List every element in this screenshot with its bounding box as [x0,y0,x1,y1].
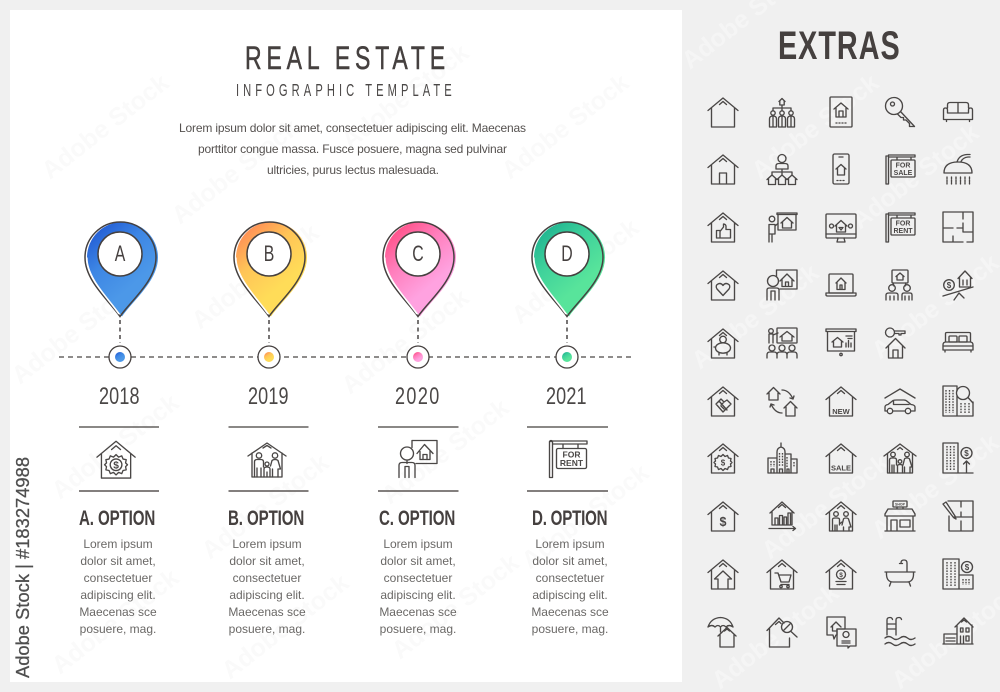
watermark pattern on extras: Adobe Stock [756,449,894,565]
icon: building value up: $ [964,449,969,458]
icon: laptop house [826,274,856,296]
icon: house dollar gear [708,444,738,473]
pin C with milestone [383,222,456,368]
pin B with milestone [234,222,307,368]
icon: car port [885,389,915,414]
icon: for sale sign [886,155,915,184]
body text: consectetuer [536,571,604,585]
option B column [228,427,308,636]
icon: for rent sign [886,213,915,242]
icon: sale house [826,444,856,473]
body text: adipiscing elit. [380,588,456,602]
watermark pattern on sheet: Adobe Stock [516,459,654,575]
icon: agent over houses [767,154,797,184]
panel: extras icon grid [708,97,973,648]
watermark pattern on sheet: Adobe Stock [36,69,174,185]
icon: presenter board [769,213,797,242]
icon: shower [944,154,972,184]
subtitle: INFOGRAPHIC TEMPLATE [236,80,452,101]
body text: Lorem ipsum [232,537,302,551]
extras heading: EXTRAS [778,23,900,68]
icon: house dollar: $ [720,515,727,529]
icon: shop [885,501,915,531]
watermark pattern on extras: Adobe Stock [686,259,824,375]
watermark pattern on extras: Adobe Stock [706,579,844,692]
icon: bathtub [885,560,915,586]
icon: shop: SHOP [895,502,906,506]
intro paragraph: porttitor congue massa. Fusce posuere, magna sed pulvinar [198,142,507,156]
pin A with milestone: A [115,243,125,267]
icon: for rent sign: RENT [893,228,913,235]
icon: couple house [826,502,856,531]
body text [228,537,306,636]
watermark pattern on sheet: Adobe Stock [336,39,474,155]
icon: couple with house [886,270,912,300]
watermark pattern on extras: Adobe Stock [866,249,1000,365]
body text: Maecenas sce [228,605,306,619]
icon: house growth chart [769,502,796,530]
body text: adipiscing elit. [80,588,156,602]
icon: house with family [248,443,286,477]
pin A with milestone [85,222,158,368]
watermark pattern on sheet: Adobe Stock [496,69,634,185]
icon: building value up [943,443,973,473]
year 2019: 2019 [248,384,288,410]
icon: city buildings [768,443,797,473]
icon: for rent sign: FOR [896,220,910,228]
icon: house with dollar gear: $ [113,461,119,472]
icon: house with garage [943,618,973,644]
year 2020: 2020 [395,384,439,410]
intro paragraph [179,121,526,177]
icon: for rent sign: RENT [560,458,584,468]
body text [79,537,157,636]
body text: Lorem ipsum [383,537,453,551]
watermark pattern on sheet: Adobe Stock [336,284,474,400]
pin D with milestone [532,222,605,368]
watermark pattern on sheet: Adobe Stock [46,389,184,505]
icon: house dollar gear: $ [721,458,726,468]
watermark pattern on extras: Adobe Stock [846,119,984,235]
stock id vertical label: Adobe Stock | #183274988 [12,457,33,678]
icon: for sale sign: SALE [894,170,913,177]
body text: Maecenas sce [379,605,457,619]
watermark pattern on extras: Adobe Stock [746,69,884,185]
icon: for rent sign: FOR [563,450,580,460]
title: REAL ESTATE [245,40,445,76]
body text [531,537,609,636]
icon: plan with pencil [943,501,973,531]
option D column [527,427,609,636]
icon: house deed: $ [839,572,843,579]
icon: new house: NEW [832,407,851,416]
watermark pattern on sheet: Adobe Stock [196,449,334,565]
heading: C. OPTION [379,505,455,530]
icon: bed [943,332,973,352]
watermark pattern on sheet: Adobe Stock [6,274,144,390]
body text: consectetuer [384,571,452,585]
icon: family house [884,444,916,473]
icon: sale house: SALE [831,464,851,472]
year 2018: 2018 [99,384,140,410]
icon: insured house umbrella [708,618,736,647]
icon: team org chart [770,98,794,127]
watermark pattern on extras: Adobe Stock [866,429,1000,545]
body text: posuere, mag. [80,622,156,636]
timeline dashed line [59,356,632,358]
pin B with milestone: B [264,243,274,267]
icon: house thumbs up [708,213,738,242]
body text: Lorem ipsum [535,537,605,551]
year 2021: 2021 [546,384,586,410]
icon: house dollar [708,502,738,531]
icon: house with door [708,155,738,184]
icon: monitor house [826,214,856,242]
watermark pattern on sheet: Adobe Stock [386,549,524,665]
icon: key above house [886,328,905,358]
body text: dolor sit amet, [229,554,305,568]
watermark pattern on sheet: Adobe Stock [506,214,644,330]
body text: adipiscing elit. [532,588,608,602]
icon: balance with dollar and house: $ [947,281,952,290]
pin D with milestone: D [561,243,573,267]
body text: Lorem ipsum [83,537,153,551]
icon: swimming pool [885,618,915,646]
icon: house piggy bank [708,329,738,358]
icon: house with dollar gear [97,441,135,478]
icon: house search [767,618,797,647]
icon: exchange houses [767,388,797,416]
panel: white infographic sheet [10,10,682,682]
icon: agent house board [767,270,797,300]
icon: new house [826,387,856,416]
icon: house heart [708,271,738,300]
icon: for rent sign [550,440,587,478]
icon: building with dollar: $ [965,563,970,572]
option A column [79,427,159,636]
icon: presentation chart [826,329,856,356]
watermark pattern on sheet: Adobe Stock [376,394,514,510]
body text: consectetuer [84,571,152,585]
icon: tablet house [830,97,852,127]
icon: chat houses [827,617,856,648]
body text: dolor sit amet, [80,554,156,568]
icon: presenter audience [767,328,797,358]
pin C with milestone: C [412,243,424,267]
body text: Maecenas sce [79,605,157,619]
watermark pattern on sheet: Adobe Stock [186,219,324,335]
body text [379,537,457,636]
icon: key [886,98,914,126]
icon: house deed [826,560,856,589]
body text: posuere, mag. [380,622,456,636]
watermark pattern on sheet: Adobe Stock [216,569,354,685]
icon: building with dollar [943,559,973,589]
icon: house [708,98,738,127]
body text: dolor sit amet, [532,554,608,568]
icon: house handshake [708,387,738,416]
icon: balance with dollar and house [943,271,973,300]
icon: for sale sign: FOR [896,162,910,170]
heading: B. OPTION [228,505,304,530]
body text: consectetuer [233,571,301,585]
watermark pattern on sheet [6,39,654,685]
icon: building search [943,386,973,416]
intro paragraph: ultricies, purus lectus malesuada. [267,163,439,177]
icon: house shopping cart [767,560,797,589]
body text: Maecenas sce [531,605,609,619]
icon: agent with house board [399,440,437,478]
body text: dolor sit amet, [380,554,456,568]
intro paragraph: Lorem ipsum dolor sit amet, consectetuer adipiscing elit. Maecenas [179,121,526,135]
watermark pattern on sheet: Adobe Stock [46,564,184,680]
body text: posuere, mag. [532,622,608,636]
heading: A. OPTION [79,505,155,530]
body text: posuere, mag. [229,622,305,636]
icon: phone house [833,154,849,184]
watermark pattern on sheet: Adobe Stock [166,114,304,230]
icon: floor plan [943,212,973,242]
icon: house up arrow [708,560,738,589]
icon: sofa [944,102,972,122]
heading: D. OPTION [532,505,608,530]
option C column [378,427,458,636]
watermark pattern on extras [676,0,1000,692]
body text: adipiscing elit. [229,588,305,602]
